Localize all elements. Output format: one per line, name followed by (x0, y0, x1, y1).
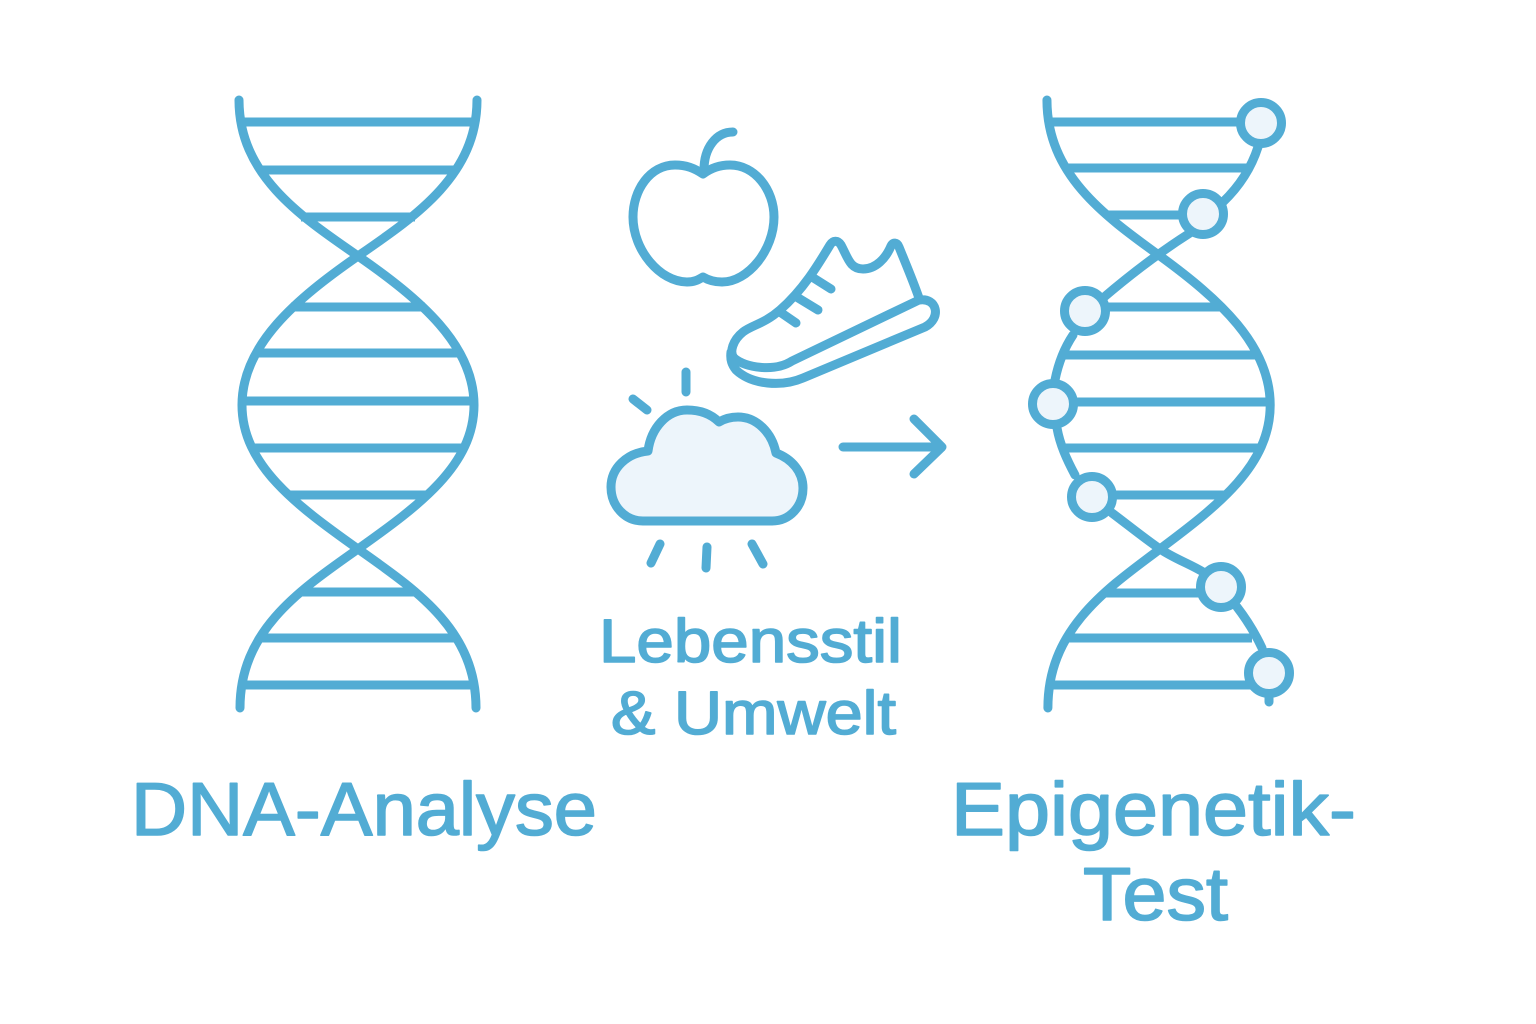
heading: Epigenetik-Test (951, 767, 1356, 936)
icon: left DNA helix (239, 100, 477, 708)
heading: Lebensstil & Umwelt: & Umwelt (611, 679, 896, 747)
icon: apple (633, 132, 774, 282)
heading: Epigenetik-Test: Test (1083, 852, 1228, 936)
icon: right DNA helix with epigenetic markers (1032, 100, 1290, 708)
heading: Epigenetik-Test: Epigenetik- (951, 767, 1356, 851)
icon: cloud (611, 410, 803, 521)
heading: Lebensstil & Umwelt: Lebensstil (599, 607, 902, 675)
arrow (843, 419, 942, 474)
icon: running shoe (731, 241, 935, 383)
icon: rain (651, 544, 763, 568)
marker nodes (1032, 102, 1290, 694)
heading: Lebensstil & Umwelt (599, 607, 902, 747)
icon: sun rays (633, 372, 686, 410)
heading: DNA-Analyse: DNA-Analyse (131, 767, 597, 851)
